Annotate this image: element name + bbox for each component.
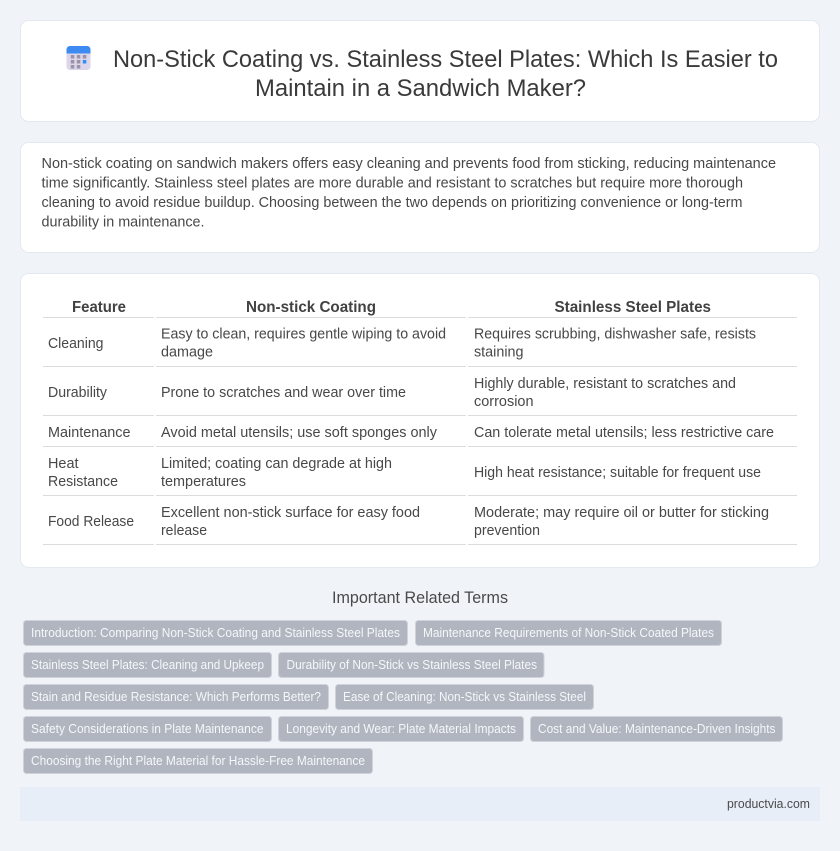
table header bbox=[72, 299, 711, 316]
table row: durability bbox=[48, 376, 736, 410]
panel: comparison table bbox=[20, 274, 820, 568]
text block: introduction: time significantly. Stainless steel plates are more durable and resistant to scratches but require more thorough bbox=[42, 176, 743, 192]
table row: food release: Excellent non-stick surface for easy food bbox=[161, 505, 420, 521]
chip bbox=[278, 716, 524, 742]
title: Non-Stick Coating vs. Stainless Steel Plates: Which Is Easier to bbox=[113, 46, 778, 73]
table row: heat resistance: Heat bbox=[48, 456, 78, 472]
table row: cleaning: Easy to clean, requires gentle wiping to avoid bbox=[161, 326, 446, 342]
chip: Ease of Cleaning: Non-Stick vs Stainless Steel bbox=[343, 690, 586, 704]
table row: food release: release bbox=[161, 523, 207, 539]
table row: heat resistance: High heat resistance; suitable for frequent use bbox=[474, 465, 761, 481]
chip: Stain and Residue Resistance: Which Performs Better? bbox=[31, 690, 321, 704]
text block: introduction: Non-stick coating on sandwich makers offers easy cleaning and prevents food from sticking, reducing maintenance bbox=[42, 156, 776, 172]
table row: heat resistance: temperatures bbox=[161, 474, 246, 490]
chip bbox=[416, 620, 722, 646]
chip bbox=[24, 620, 408, 646]
table row: durability: corrosion bbox=[474, 394, 534, 410]
chip: Stainless Steel Plates: Cleaning and Upkeep bbox=[31, 658, 264, 672]
table row: durability: Highly durable, resistant to scratches and bbox=[474, 376, 736, 392]
footer: productvia.com bbox=[727, 797, 810, 811]
table row: heat resistance: Limited; coating can degrade at high bbox=[161, 456, 392, 472]
table row: durability: Prone to scratches and wear over time bbox=[161, 385, 406, 401]
table row: cleaning bbox=[48, 326, 756, 360]
icon: calendar bbox=[66, 46, 90, 70]
table header: Non-stick Coating bbox=[246, 299, 376, 316]
footer bbox=[20, 787, 820, 821]
table row: food release: prevention bbox=[474, 523, 540, 539]
chip bbox=[24, 652, 272, 678]
table row: cleaning: Requires scrubbing, dishwasher safe, resists bbox=[474, 326, 756, 342]
table row: food release bbox=[48, 505, 769, 539]
table row: cleaning: Cleaning bbox=[48, 336, 104, 352]
chip bbox=[278, 652, 544, 678]
chip: Maintenance Requirements of Non-Stick Coated Plates bbox=[423, 626, 714, 640]
table row: cleaning: damage bbox=[161, 344, 213, 360]
table row: maintenance bbox=[48, 425, 774, 441]
chip: Choosing the Right Plate Material for Hassle-Free Maintenance bbox=[31, 754, 365, 768]
table row: maintenance: Can tolerate metal utensils; less restrictive care bbox=[474, 425, 774, 441]
chip bbox=[24, 716, 272, 742]
table row: heat resistance bbox=[48, 456, 761, 490]
table header: Feature bbox=[72, 299, 126, 316]
text block: introduction bbox=[42, 156, 776, 230]
chip bbox=[336, 684, 594, 710]
heading: important related terms: Important Related Terms bbox=[332, 589, 508, 607]
chip: Safety Considerations in Plate Maintenance bbox=[31, 722, 264, 736]
table row: food release: Moderate; may require oil or butter for sticking bbox=[474, 505, 769, 521]
related terms chips bbox=[24, 620, 782, 774]
table row: cleaning: staining bbox=[474, 344, 524, 360]
chip bbox=[530, 716, 782, 742]
table row: heat resistance: Resistance bbox=[48, 474, 118, 490]
chip bbox=[24, 684, 328, 710]
table row: maintenance: Avoid metal utensils; use soft sponges only bbox=[161, 425, 438, 441]
table row: maintenance: Maintenance bbox=[48, 425, 130, 441]
title bbox=[113, 46, 778, 102]
table header: Stainless Steel Plates bbox=[554, 299, 711, 316]
text block: introduction: durability in maintenance. bbox=[42, 214, 204, 230]
table row: food release: Food Release bbox=[48, 514, 134, 530]
panel: introduction bbox=[20, 142, 820, 252]
text block: introduction: cleaning to avoid residue buildup. Choosing between the two depends on prioritizing convenience or long-term bbox=[42, 195, 742, 211]
chip: Cost and Value: Maintenance-Driven Insights bbox=[538, 722, 776, 736]
title: Maintain in a Sandwich Maker? bbox=[255, 75, 586, 102]
chip bbox=[24, 748, 372, 774]
table row: durability: Durability bbox=[48, 385, 108, 401]
panel: header bbox=[20, 20, 820, 122]
chip: Durability of Non-Stick vs Stainless Steel Plates bbox=[286, 658, 537, 672]
chip: Longevity and Wear: Plate Material Impacts bbox=[286, 722, 516, 736]
chip: Introduction: Comparing Non-Stick Coating and Stainless Steel Plates bbox=[31, 626, 400, 640]
